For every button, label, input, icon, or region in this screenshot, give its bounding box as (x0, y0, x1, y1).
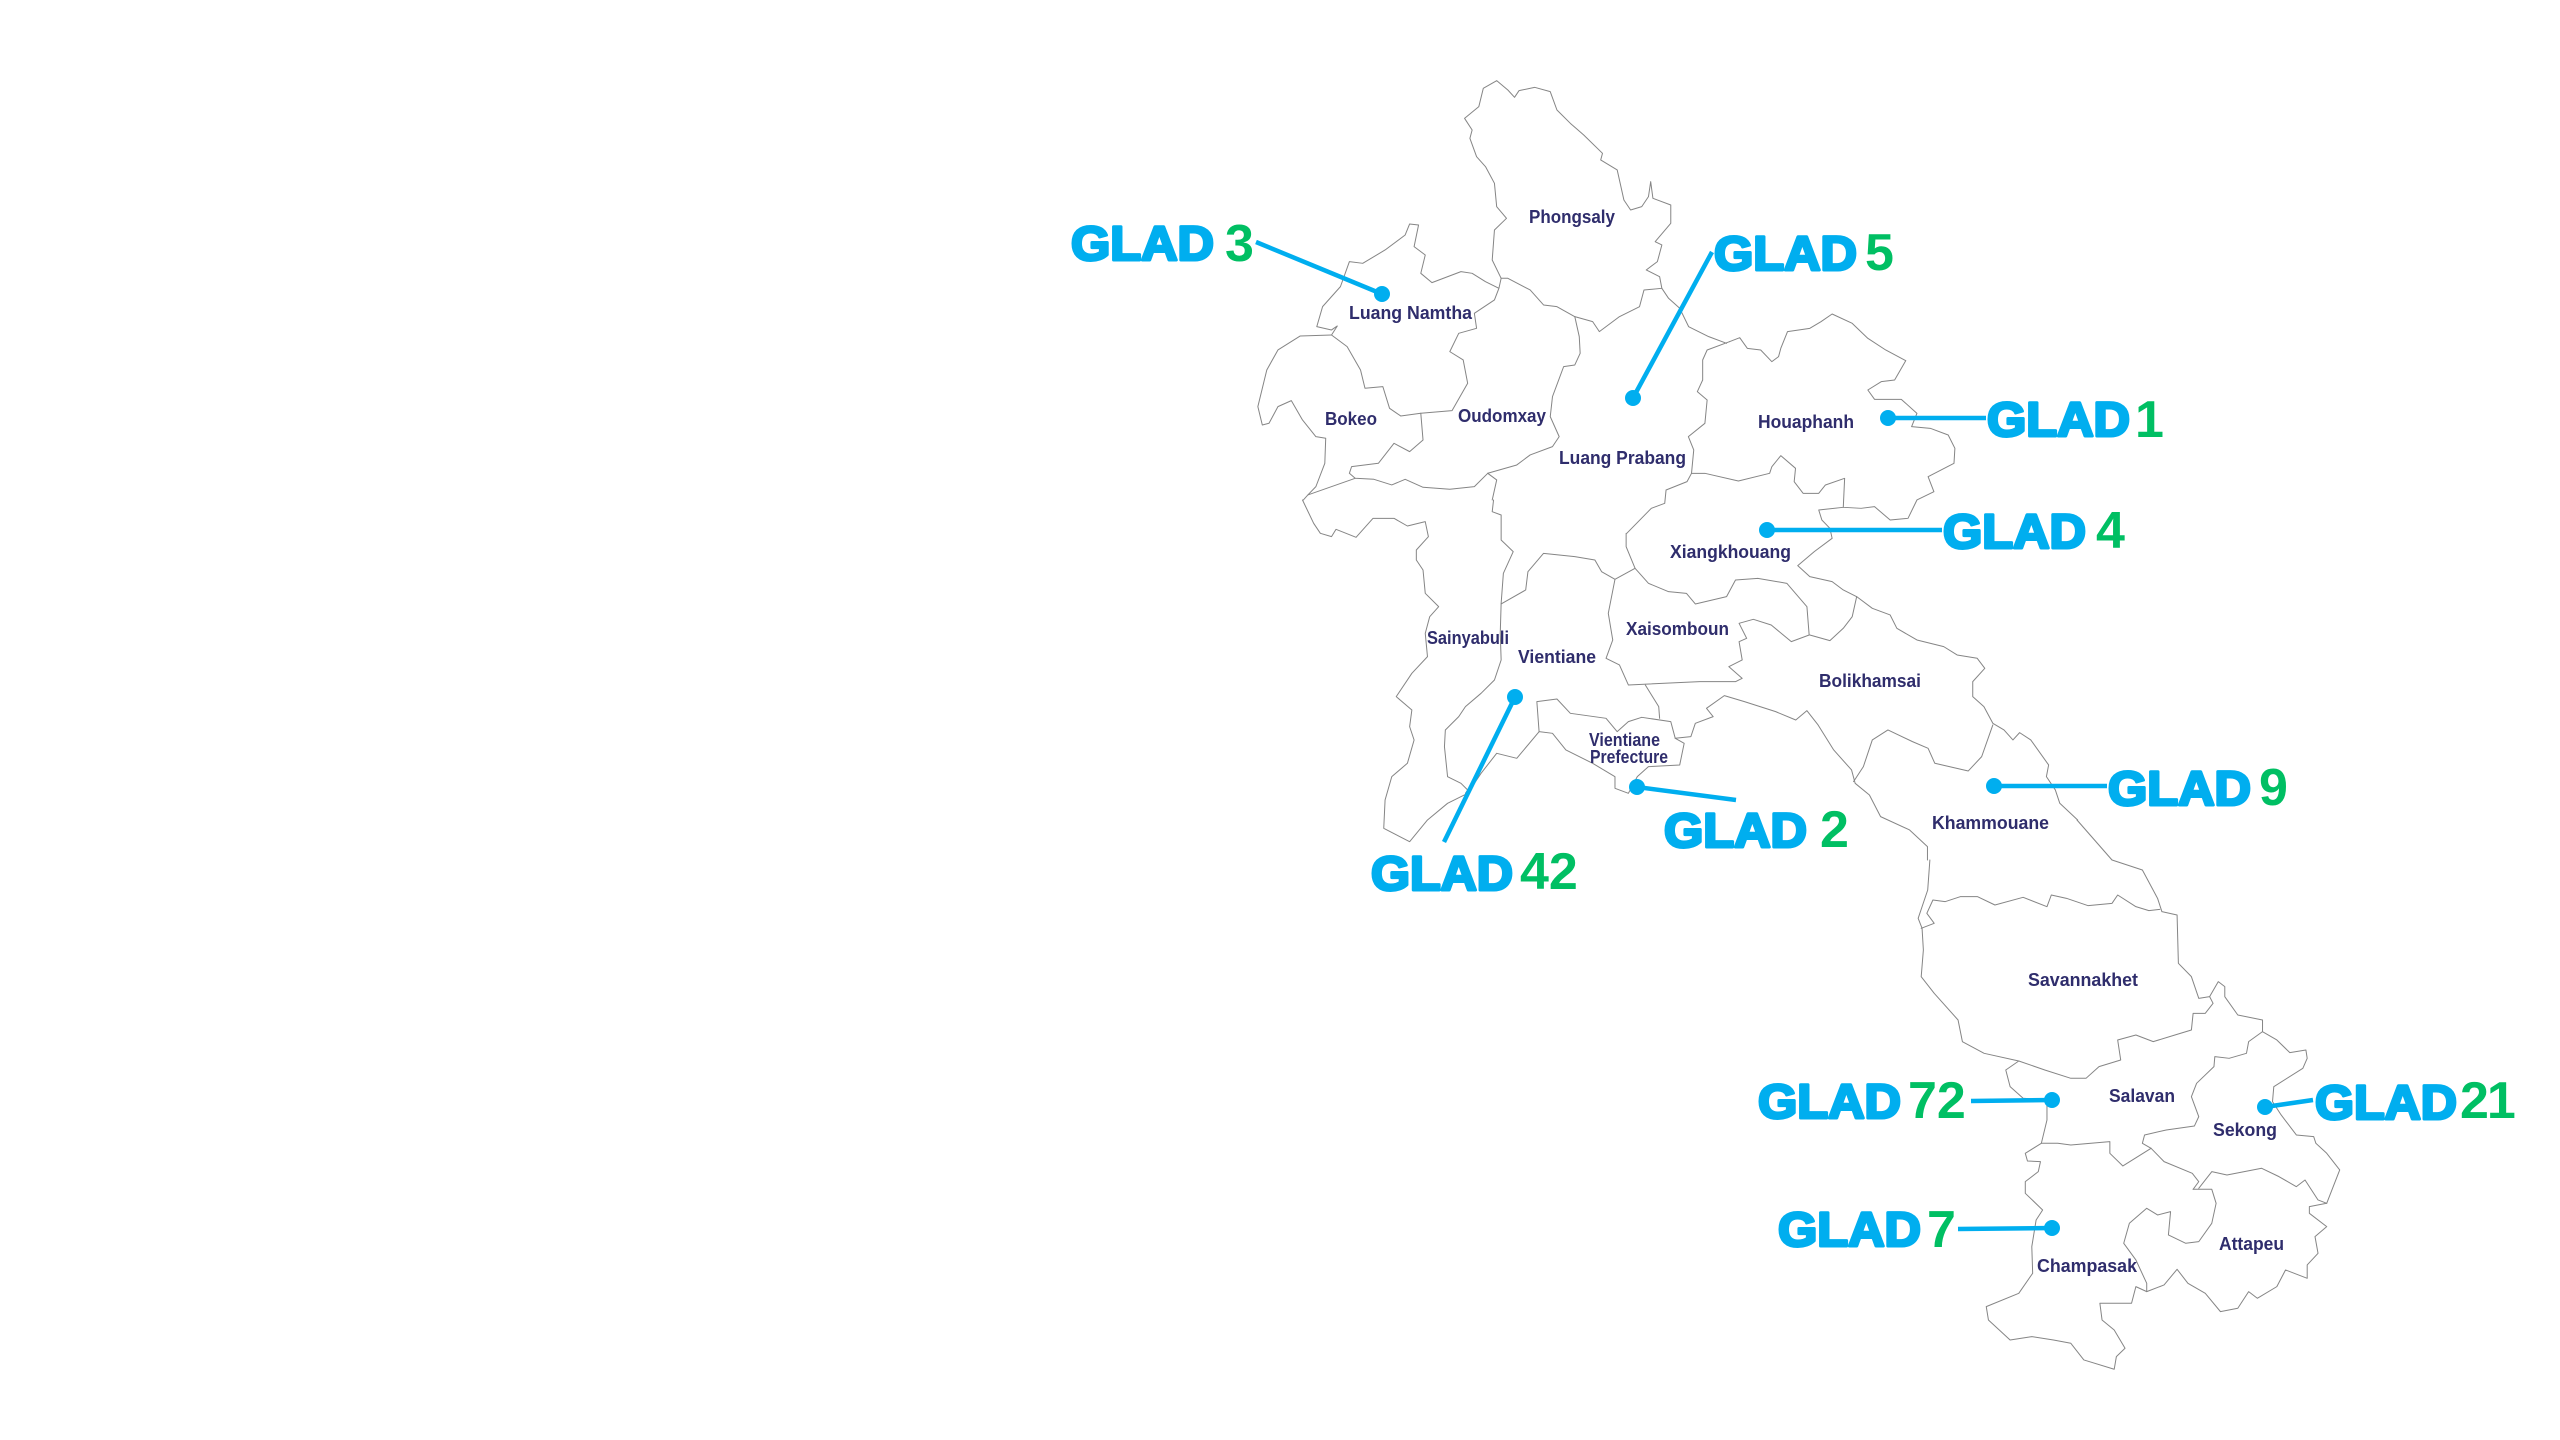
province: Oudomxay: Oudomxay (1458, 406, 1546, 426)
province: Xiangkhouang: Xiangkhouang (1670, 542, 1791, 562)
callout: GLAD 1: GLAD (1987, 394, 2130, 447)
northern province borders (1258, 81, 1727, 500)
southern borders (1918, 860, 2340, 1369)
province: Bokeo: Bokeo (1325, 409, 1377, 429)
callout: GLAD 21: GLAD (2315, 1077, 2457, 1130)
central and western borders (1302, 500, 1927, 860)
province: Khammouane: Khammouane (1932, 813, 2049, 833)
callout: GLAD 42: GLAD (1371, 848, 1513, 901)
province: Houaphanh: Houaphanh (1758, 412, 1854, 432)
callout: GLAD 5: GLAD (1714, 228, 1857, 281)
province: Salavan: Salavan (2109, 1086, 2175, 1106)
province: Savannakhet: Savannakhet (2028, 970, 2138, 990)
callout: GLAD 9: GLAD (2108, 763, 2251, 816)
province: Vientiane: Vientiane (1518, 647, 1596, 667)
callout: GLAD 2 (1629, 779, 1849, 859)
north-eastern borders (1627, 314, 2078, 820)
callout: GLAD 7: GLAD (1778, 1204, 1921, 1257)
callout: GLAD 72 (1758, 1072, 2060, 1130)
callout: GLAD 3 (1071, 215, 1390, 302)
callout: GLAD 7: 7 (1927, 1201, 1956, 1259)
map: Laos province borders (1258, 81, 2340, 1369)
province: Sainyabuli: Sainyabuli (1427, 628, 1509, 648)
province: Luang Namtha: Luang Namtha (1349, 303, 1473, 323)
callout: GLAD 3: GLAD (1071, 218, 1214, 271)
province: Champasak: Champasak (2037, 1256, 2138, 1276)
province: Attapeu: Attapeu (2219, 1234, 2284, 1254)
callout: GLAD 21 (2257, 1072, 2515, 1130)
callout: GLAD 2: GLAD (1664, 805, 1807, 858)
callout: GLAD 72: 72 (1908, 1072, 1966, 1130)
province: Luang Prabang: Luang Prabang (1559, 448, 1686, 468)
callout: GLAD 7 (1778, 1201, 2060, 1259)
province: Xaisomboun: Xaisomboun (1626, 619, 1729, 639)
callout: GLAD 4: 4 (2096, 502, 2125, 560)
callout: GLAD 72: GLAD (1758, 1076, 1901, 1129)
callout: GLAD 4 (1759, 502, 2125, 560)
callout: GLAD 42 (1371, 689, 1578, 901)
province: Vientiane Prefecture: Vientiane (1589, 730, 1660, 750)
province: Phongsaly: Phongsaly (1529, 207, 1615, 227)
callout: GLAD 5 (1625, 224, 1894, 406)
province names (1325, 207, 2284, 1276)
callout: GLAD 9 (1986, 759, 2288, 817)
callout: GLAD 3: 3 (1225, 215, 1254, 273)
callout: GLAD 1: 1 (2135, 391, 2164, 449)
callout: GLAD 2: 2 (1820, 801, 1849, 859)
callout: GLAD 9: 9 (2259, 759, 2288, 817)
callout: GLAD 42: 42 (1520, 843, 1578, 901)
callout: GLAD 1 (1880, 391, 2164, 449)
callout: GLAD 21: 21 (2460, 1072, 2515, 1130)
province: Sekong: Sekong (2213, 1120, 2277, 1140)
connector border (2077, 820, 2112, 860)
province: Vientiane Prefecture: Prefecture (1590, 747, 1668, 767)
callout: GLAD 5: 5 (1865, 224, 1894, 282)
province: Bolikhamsai: Bolikhamsai (1819, 671, 1921, 691)
callout: GLAD 4: GLAD (1943, 506, 2086, 559)
